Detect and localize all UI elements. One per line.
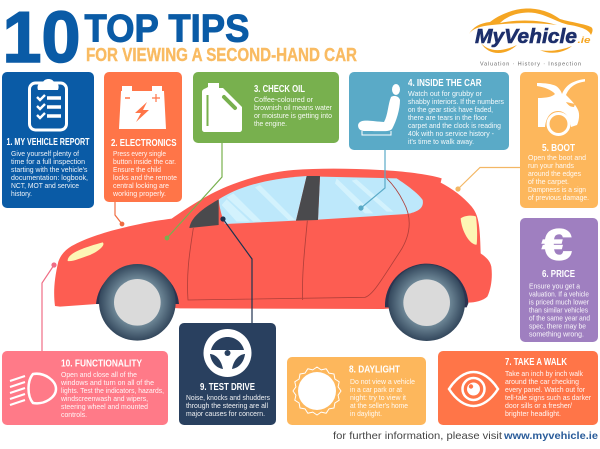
connector: functionality: [42, 263, 56, 351]
connector: check oil: [165, 143, 222, 240]
panel: 1 my vehicle report: Give yourself plenty of: [11, 149, 79, 158]
panel: 1 my vehicle report: time for a full inspection: [11, 157, 85, 166]
panel: 9 test drive: 9. TEST DRIVE: [200, 381, 255, 393]
door seams: [188, 178, 409, 300]
title: 10 top tips: TOP TIPS: [84, 8, 250, 50]
panel: 5 boot: of previous damage.: [528, 193, 589, 202]
panel: 2 electronics: [104, 72, 182, 202]
panel: 10 functionality: [2, 351, 168, 425]
footer: website: for further information, please visit: [333, 430, 502, 442]
panel: 2 electronics: Ensure the child: [113, 165, 161, 174]
panel: 4 inside the car: Watch out for grubby or: [408, 89, 483, 98]
panel: 3 check oil: Coffee-coloured or: [254, 95, 314, 104]
rear wheel: [385, 264, 468, 341]
panel: 4 inside the car: 4. INSIDE THE CAR: [408, 77, 482, 89]
panel: 6 price: 6. PRICE: [542, 268, 575, 280]
panel: 4 inside the car: carpet and the clock is reading: [408, 121, 501, 130]
panel: 6 price: of the same year and: [529, 314, 590, 322]
front wheel: [96, 264, 179, 341]
panel: 2 electronics: locks and the remote: [113, 173, 177, 182]
panel: 8 daylight: night: try to view it: [350, 393, 406, 402]
panel: 3 check oil: [193, 72, 339, 143]
side windows: [219, 176, 307, 224]
footer: website: [333, 430, 598, 442]
panel: 7 take a walk: around the car checking: [505, 377, 579, 386]
panel: 10 functionality: windows and turn on all of the: [60, 378, 154, 387]
panel: 4 inside the car: there are tears in the floor: [408, 113, 488, 122]
panel: 8 daylight: Do not view a vehicle: [350, 377, 415, 386]
logo: MyVehicle.ie: Valuation · History · Inspection: [480, 62, 581, 68]
panel: 6 price: [520, 218, 598, 342]
panel: 2 electronics: Press every single: [113, 149, 166, 158]
title: 10 top tips: 10: [2, 0, 80, 78]
panel: 2 electronics: button inside the car.: [113, 157, 176, 166]
icon: oil jug: [202, 83, 242, 132]
panel: 2 electronics: working properly.: [112, 189, 166, 198]
panel: 6 price: spec, there may be: [529, 322, 586, 330]
icon: euro sign: €: [542, 220, 572, 270]
panel: 1 my vehicle report: [2, 72, 94, 208]
panel: 10 functionality: steering wheel and mounted: [61, 402, 148, 411]
panel: 4 inside the car: it's time to walk away.: [408, 137, 474, 146]
panel: 7 take a walk: brighter headlight.: [505, 409, 561, 418]
panel: 9 test drive: through the steering are all: [186, 401, 268, 410]
connector: test drive: [221, 217, 252, 323]
icon: car open boot: [537, 79, 585, 134]
panel: 1 my vehicle report: history.: [11, 189, 32, 198]
panel: 6 price: is priced much lower: [529, 298, 590, 306]
title: 10 top tips: FOR VIEWING A SECOND-HAND CAR: [86, 44, 357, 65]
logo: MyVehicle.ie: MyVehicle: [475, 26, 577, 48]
connector: inside the car: [359, 150, 385, 210]
panel: 3 check oil: or moisture is getting into: [254, 111, 332, 120]
icon: sun: [293, 367, 341, 415]
panel: 7 take a walk: 7. TAKE A WALK: [505, 356, 567, 368]
title: 10 top tips: [2, 0, 357, 78]
footer: website: www.myvehicle.ie: [503, 430, 598, 442]
panel: 3 check oil: the engine.: [254, 119, 287, 128]
panel: 4 inside the car: 40k with no service history -: [408, 129, 495, 138]
panel: 6 price: something wrong.: [529, 330, 584, 338]
panel: 9 test drive: [179, 323, 276, 425]
panel: 8 daylight: at the seller's home: [350, 401, 408, 410]
panel: 2 electronics: central locking are: [113, 181, 169, 190]
panel: 9 test drive: Noise, knocks and shudders: [186, 393, 270, 402]
panel: 5 boot: 5. BOOT: [542, 142, 575, 154]
car body: [54, 169, 492, 309]
panel: 10 functionality: Open and close all of the: [61, 370, 137, 379]
panel: 10 functionality: 10. FUNCTIONALITY: [61, 358, 142, 370]
panel: 7 take a walk: tell-tale signs such as darker: [505, 393, 592, 402]
panel: 7 take a walk: door sills or a fresher/: [505, 401, 572, 410]
logo: MyVehicle.ie: [469, 8, 593, 68]
panel: 9 test drive: major causes for concern.: [186, 409, 265, 418]
panel: 1 my vehicle report: NCT, MOT and service: [11, 181, 79, 190]
headlight: [68, 242, 103, 261]
panel: 8 daylight: in a car park or at: [350, 385, 402, 394]
panel: 6 price: than similar vehicles: [529, 306, 588, 314]
icon: steering wheel: [204, 329, 252, 377]
panel: 7 take a walk: [438, 351, 598, 425]
icon: car seat: [358, 84, 400, 135]
panel: 8 daylight: in daylight.: [350, 409, 382, 418]
panel: 4 inside the car: shabby interiors. If the numbers: [408, 97, 504, 106]
panel: 3 check oil: 3. CHECK OIL: [254, 83, 305, 95]
panel: 6 price: Ensure you get a: [529, 282, 580, 290]
tail light: [461, 216, 477, 245]
panel: 10 functionality: lights. Test the indicators, hazards,: [61, 386, 164, 395]
panel: 5 boot: Open the boot and: [528, 153, 586, 162]
connector: boot: [456, 168, 520, 191]
icon: car battery: [119, 86, 166, 129]
panel: 5 boot: of the carpet.: [528, 177, 569, 186]
panel: 6 price: valuation. If a vehicle: [529, 290, 589, 298]
panel: 10 functionality: windscreenwash and wipers,: [60, 394, 148, 403]
panel: 2 electronics: 2. ELECTRONICS: [111, 137, 176, 149]
icon: eye: [449, 372, 498, 406]
panel: 3 check oil: brownish oil means water: [254, 103, 333, 112]
panel: 1 my vehicle report: 1. MY VEHICLE REPORT: [6, 136, 90, 148]
panel: 4 inside the car: [349, 72, 509, 150]
panel: 4 inside the car: on the gear stick have faded,: [408, 105, 493, 114]
panel: 7 take a walk: Take an inch by inch walk: [505, 369, 583, 378]
panel: 8 daylight: [287, 357, 426, 425]
panel: 5 boot: around the edges: [528, 169, 581, 178]
panel: 1 my vehicle report: documentation: logbook,: [11, 173, 88, 182]
panel: 5 boot: Dampness is a sign: [528, 185, 586, 194]
icon: headlight: [10, 374, 56, 405]
panel: 5 boot: [520, 72, 598, 208]
logo: MyVehicle.ie: .ie: [578, 35, 590, 45]
panel: 5 boot: run your hands: [528, 161, 574, 170]
panel: 8 daylight: 8. DAYLIGHT: [349, 364, 400, 376]
car illustration: [54, 169, 492, 341]
panel: 1 my vehicle report: starting with the vehicle's: [11, 165, 88, 174]
panel: 10 functionality: controls.: [61, 410, 87, 419]
window pillars: [296, 176, 320, 221]
connector: electronics: [115, 202, 124, 226]
icon: clipboard checklist: [30, 79, 66, 130]
panel: 7 take a walk: every panel. Watch out for: [505, 385, 586, 394]
